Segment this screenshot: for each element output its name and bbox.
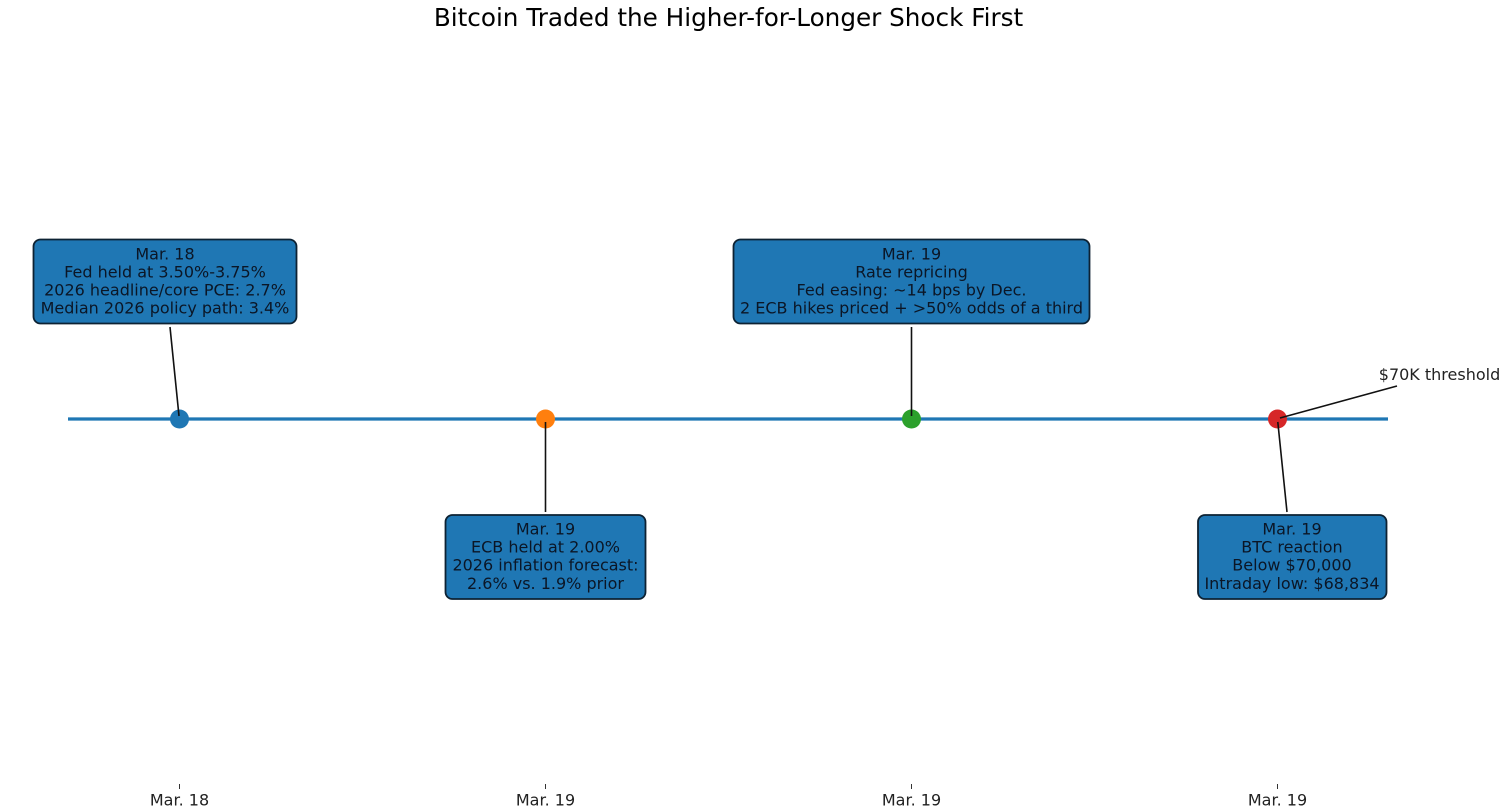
callout: ECB decision: ECB held at 2.00% [471,537,620,556]
callout: ECB decision [446,515,646,599]
callout: BTC reaction [1198,515,1386,599]
timeline axis line [68,417,1388,421]
callout: Fed decision [34,240,296,324]
callout: rate repricing: Fed easing: ~14 bps by Dec. [797,280,1026,299]
callout: Fed decision: 2026 headline/core PCE: 2.7% [44,280,286,299]
callout: Fed decision: Median 2026 policy path: 3.4% [41,298,289,317]
callout: Fed decision: Fed held at 3.50%-3.75% [64,262,266,281]
marker: Mar. 18 Fed [170,327,189,428]
marker: Mar. 19 ECB [536,410,555,512]
x axis tick labels: Mar. 19 [1248,790,1307,809]
callout: Fed decision: Mar. 18 [135,244,195,263]
marker: Mar. 19 BTC reaction [1268,410,1287,512]
callout: BTC reaction: Intraday low: $68,834 [1204,574,1380,593]
callout: rate repricing: 2 ECB hikes priced + >50% odds of a third [740,298,1083,317]
x axis tick labels: Mar. 18 [150,790,209,809]
title: Bitcoin Traded the Higher-for-Longer Shock First [434,3,1023,32]
callout: rate repricing: Mar. 19 [882,244,941,263]
callout: ECB decision: 2.6% vs. 1.9% prior [467,574,624,593]
callout: ECB decision: Mar. 19 [516,519,575,538]
x axis tick labels: Mar. 19 [516,790,575,809]
callout: BTC reaction: BTC reaction [1241,537,1343,556]
callout: BTC reaction: Mar. 19 [1262,519,1322,538]
callout: rate repricing [734,240,1090,324]
x axis tick labels: Mar. 19 [882,790,941,809]
callout: rate repricing: Rate repricing [855,262,968,281]
marker: Mar. 19 rate repricing [902,327,921,428]
annotation: $70K threshold: $70K threshold [1379,365,1500,384]
annotation: $70K threshold [1280,365,1500,418]
callout: ECB decision: 2026 inflation forecast: [452,555,639,574]
x axis tick labels [150,784,1307,809]
callout: BTC reaction: Below $70,000 [1232,555,1352,574]
